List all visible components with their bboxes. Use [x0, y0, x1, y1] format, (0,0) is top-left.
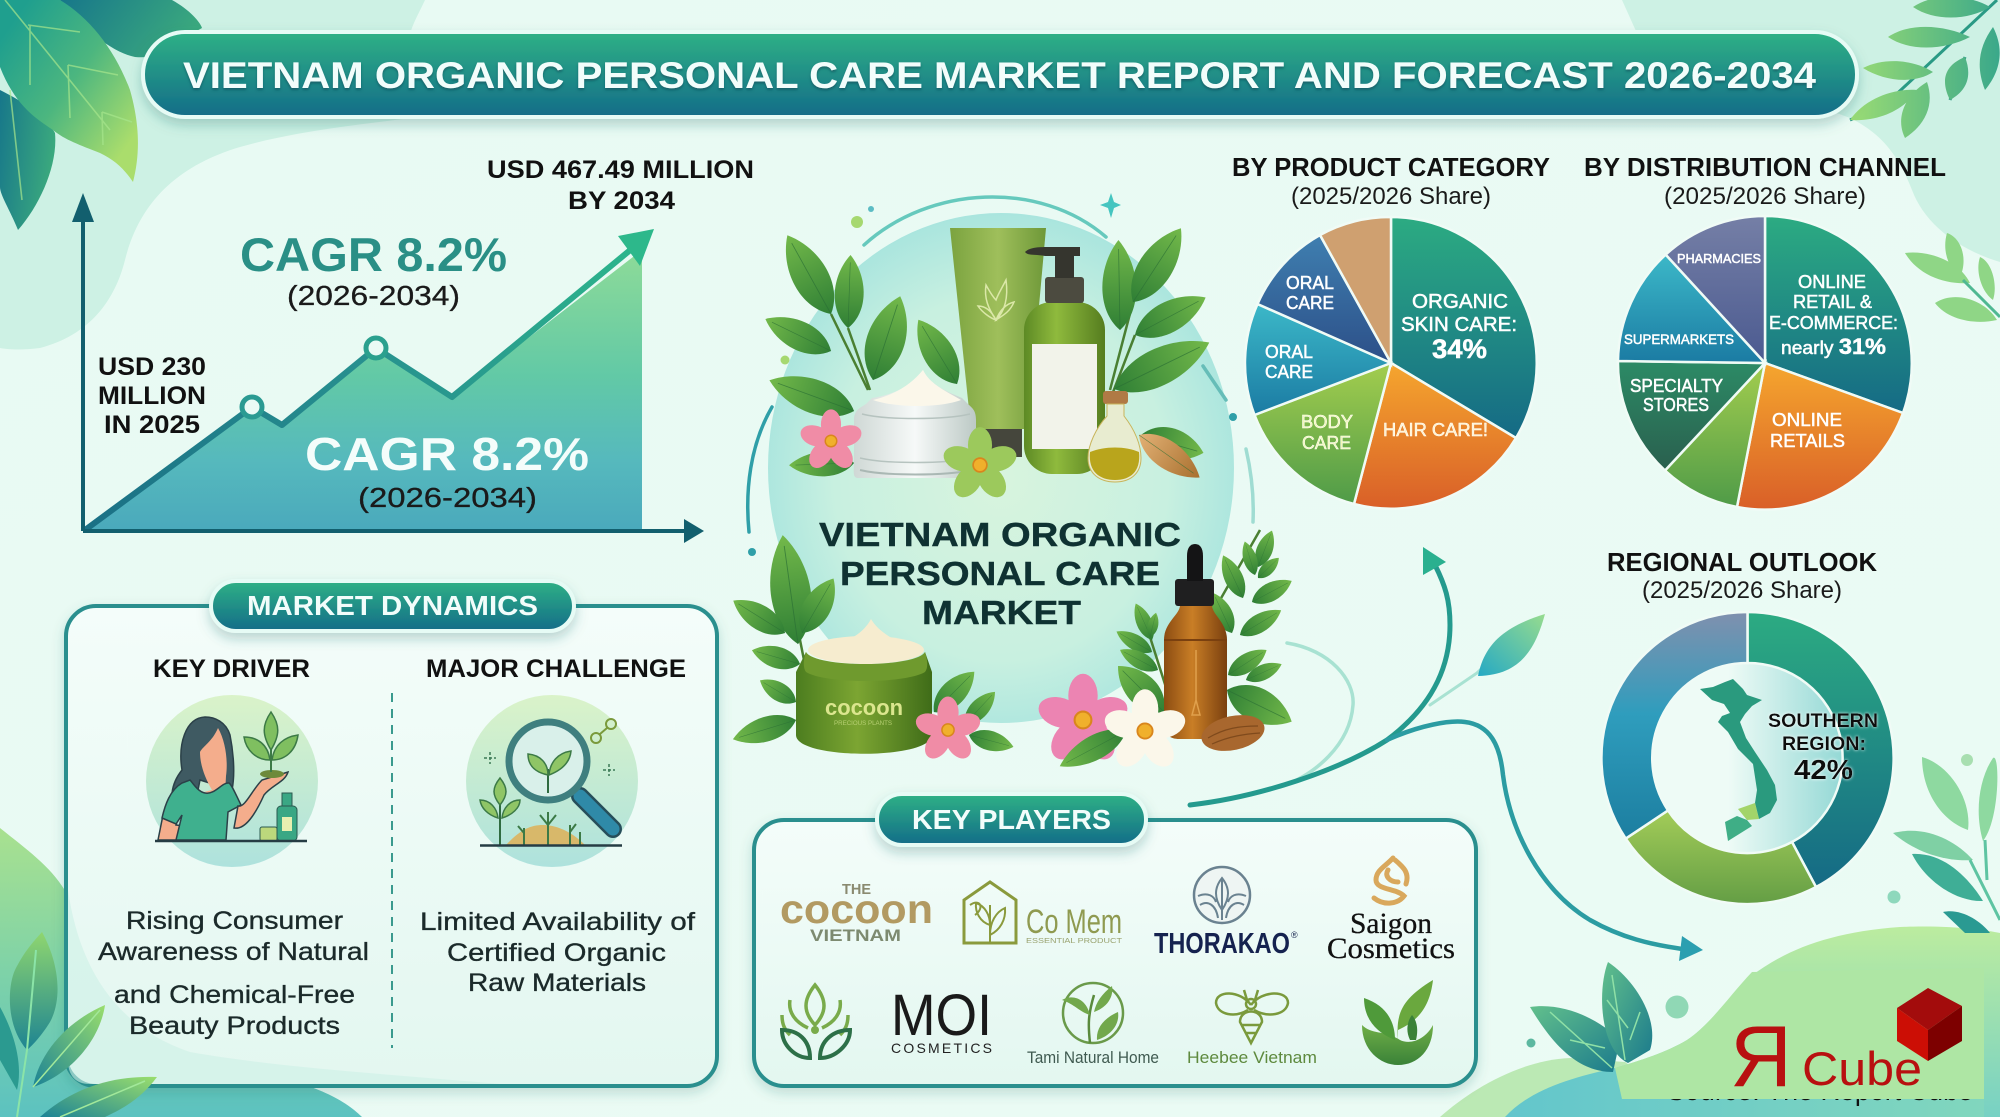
axes [83, 215, 690, 531]
pill: key players: KEY PLAYERS [912, 804, 1111, 835]
green cocoon jar: cocoon [825, 695, 903, 720]
pie labels: distribution channel: SPECIALTY [1630, 376, 1723, 396]
marker 2025 [242, 397, 262, 417]
pie labels: distribution channel: STORES [1643, 395, 1709, 415]
cagr green: CAGR 8.2% [240, 228, 507, 281]
logo patch [1615, 968, 1984, 1099]
text: major challenge: Raw Materials [468, 969, 646, 997]
decoration: bottom right leaves [1526, 962, 1688, 1072]
pie labels: product category: ORAL [1286, 273, 1334, 293]
logo: the cocoon vietnam: THE [842, 881, 871, 898]
text: key driver [98, 907, 369, 1040]
pie labels: product category: BODY [1301, 412, 1353, 432]
cagr white [305, 428, 589, 513]
centre title: MARKET [922, 594, 1081, 631]
logo: co mem: Co Mem [1026, 903, 1122, 941]
heading: regional outlook: (2025/2026 Share) [1642, 577, 1842, 604]
logo: green leaf bowl [1362, 980, 1433, 1065]
heading: regional outlook: REGIONAL OUTLOOK [1607, 547, 1877, 577]
heading: regional outlook [1607, 547, 1877, 604]
faded curve [1280, 643, 1353, 787]
logo: the cocoon vietnam: VIETNAM [810, 926, 901, 945]
pie labels: product category: CARE [1302, 433, 1351, 453]
heading: product category [1232, 152, 1550, 210]
logo cube [1897, 988, 1962, 1061]
logo wordmark [1730, 1009, 1922, 1105]
southern region callout: 42% [1794, 754, 1853, 785]
pie labels: product category: 34% [1432, 334, 1487, 364]
arrowhead up [1423, 547, 1446, 575]
panel inner tint [68, 890, 500, 1084]
logo: co mem: ESSENTIAL PRODUCT [1026, 938, 1123, 945]
decoration: source line behind the logo patch: Source: The Report Cube [1667, 1075, 1973, 1106]
southern region callout: REGION: [1782, 734, 1866, 755]
donut chart: regional outlook [1601, 612, 1894, 904]
cagr white: (2026-2034) [358, 482, 537, 513]
arrow to charts [1190, 565, 1450, 805]
growth chart [72, 156, 754, 543]
logo: tami natural home [1027, 983, 1159, 1067]
logo: heebee vietnam [1187, 990, 1317, 1067]
lower flowers and almond [913, 674, 1268, 777]
logo: lotus mark [782, 985, 850, 1058]
logo: saigon cosmetics: Cosmetics [1327, 932, 1455, 965]
backdrop circle [768, 213, 1234, 723]
decoration: bottom left leaves [0, 932, 58, 1117]
x axis arrow [684, 519, 704, 543]
divider line [391, 693, 393, 1048]
cagr green [240, 228, 507, 311]
pie labels: distribution channel: ONLINE [1772, 410, 1842, 430]
arrowhead right [1679, 936, 1703, 961]
icon: woman with plant [146, 695, 318, 867]
white cream jar [854, 370, 976, 478]
heading: key driver: KEY DRIVER [153, 655, 310, 683]
leaf stem [1430, 642, 1510, 705]
southern region callout: SOUTHERN [1768, 711, 1878, 732]
trend arrowhead [618, 229, 654, 266]
pie labels: distribution channel: PHARMACIES [1677, 251, 1761, 266]
vietnam map [1700, 679, 1777, 841]
heading: major challenge: MAJOR CHALLENGE [426, 655, 686, 683]
logo: rcube [1730, 988, 1962, 1105]
label 2034 value [487, 156, 754, 215]
decoration: top right branch [1850, 0, 2000, 138]
centre title: PERSONAL CARE [840, 555, 1160, 592]
label 2034 value: USD 467.49 MILLION [487, 156, 754, 184]
logo wordmark: Cube [1802, 1042, 1922, 1095]
amber dropper bottle [1164, 544, 1227, 739]
arrow to regional [1387, 722, 1690, 950]
label 2025 value: USD 230 [98, 353, 206, 381]
leaf [1478, 614, 1545, 676]
pie labels: product category: CARE [1286, 293, 1334, 313]
pie labels: distribution channel: SUPERMARKETS [1624, 331, 1734, 347]
label 2025 value [98, 353, 206, 439]
logo: co mem [964, 882, 1123, 945]
pie labels: product category: ORGANIC [1412, 291, 1508, 313]
orbit arcs [748, 197, 1253, 532]
y axis arrow [72, 193, 94, 222]
chart area [83, 250, 642, 531]
label 2025 value: MILLION [98, 382, 206, 410]
green cocoon jar [796, 619, 932, 754]
logo: moi cosmetics: MOI [891, 983, 992, 1048]
text: key driver: Beauty Products [129, 1012, 340, 1040]
cagr green: (2026-2034) [287, 280, 460, 311]
flow arrows [1190, 547, 1703, 961]
logo: thorakao: THORAKAO [1154, 928, 1290, 960]
pie labels: distribution channel: ONLINE [1798, 272, 1866, 292]
pie labels: product category [1265, 273, 1517, 453]
pie labels: product category: SKIN CARE: [1401, 314, 1517, 336]
decoration: right side sprig [1905, 233, 2000, 322]
cagr white: CAGR 8.2% [305, 428, 589, 480]
upper leaves [759, 219, 1217, 489]
decoration: bottom left front leaves [33, 1005, 157, 1117]
pill: key players [877, 794, 1146, 845]
title banner [143, 32, 1857, 117]
label 2025 value: IN 2025 [104, 411, 200, 439]
pie chart: distribution channel [1618, 216, 1912, 510]
pill: market dynamics: MARKET DYNAMICS [247, 590, 538, 621]
pie labels: distribution channel: E-COMMERCE: [1769, 313, 1898, 333]
central illustration [727, 193, 1299, 777]
panel: key players [754, 794, 1476, 1086]
pump bottle [1024, 247, 1105, 474]
logo wordmark: Я [1730, 1009, 1792, 1105]
icon: magnifier and plants [466, 695, 638, 867]
logo: saigon cosmetics [1327, 858, 1455, 965]
pie labels: distribution channel: RETAIL & [1793, 292, 1872, 312]
text: major challenge: Certified Organic [447, 939, 666, 967]
text: key driver: Awareness of Natural [98, 938, 369, 966]
logo: heebee vietnam: Heebee Vietnam [1187, 1048, 1317, 1067]
decoration: top left leaves [0, 0, 202, 230]
southern region callout [1768, 711, 1878, 785]
chart trend line [85, 242, 640, 530]
oil bottle [1088, 391, 1141, 482]
pie labels: product category: CARE [1265, 362, 1313, 382]
label 2034 value: BY 2034 [568, 187, 675, 215]
logo: tami natural home: Tami Natural Home [1027, 1048, 1159, 1067]
pie labels: product category: ORAL [1265, 342, 1313, 362]
pill: market dynamics [211, 581, 574, 631]
heading: distribution channel: BY DISTRIBUTION CHANNEL [1584, 152, 1946, 182]
panel: market dynamics [66, 581, 717, 1086]
centre title: VIETNAM ORGANIC [819, 516, 1181, 553]
pie labels: distribution channel: RETAILS [1770, 431, 1845, 451]
text: major challenge [420, 908, 695, 997]
logo: thorakao [1154, 867, 1298, 960]
logo: saigon cosmetics: Saigon [1350, 907, 1432, 940]
heading: product category: (2025/2026 Share) [1291, 183, 1491, 210]
logo: the cocoon vietnam [780, 881, 933, 945]
heading: distribution channel: (2025/2026 Share) [1664, 183, 1866, 210]
sparkle dots [748, 193, 1237, 556]
text: major challenge: Limited Availability of [420, 908, 695, 936]
logo: moi cosmetics: COSMETICS [891, 1040, 992, 1056]
logo: thorakao: ® [1291, 930, 1298, 940]
pie labels: distribution channel [1624, 251, 1898, 451]
lower leaves [727, 528, 1299, 756]
heading: distribution channel [1584, 152, 1946, 210]
decoration: lower right plant [1888, 754, 2000, 933]
green tube [950, 228, 1046, 457]
text: key driver: Rising Consumer [126, 907, 343, 935]
green cocoon jar: PRECIOUS PLANTS [834, 721, 892, 727]
pie chart: product category [1245, 217, 1537, 509]
title banner: VIETNAM ORGANIC PERSONAL CARE MARKET REPORT AND FORECAST 2026-2034 [183, 55, 1816, 96]
pie labels: product category: HAIR CARE! [1383, 420, 1488, 440]
logo: the cocoon vietnam: cocoon [780, 886, 933, 932]
decoration: bottom right hill [1615, 927, 2000, 1117]
marker mid [366, 338, 386, 358]
heading: product category: BY PRODUCT CATEGORY [1232, 152, 1550, 182]
centre title [819, 516, 1181, 631]
pie labels: distribution channel: nearly 31% [1781, 334, 1886, 359]
text: key driver: and Chemical-Free [114, 981, 355, 1009]
upper flowers [798, 409, 1020, 503]
